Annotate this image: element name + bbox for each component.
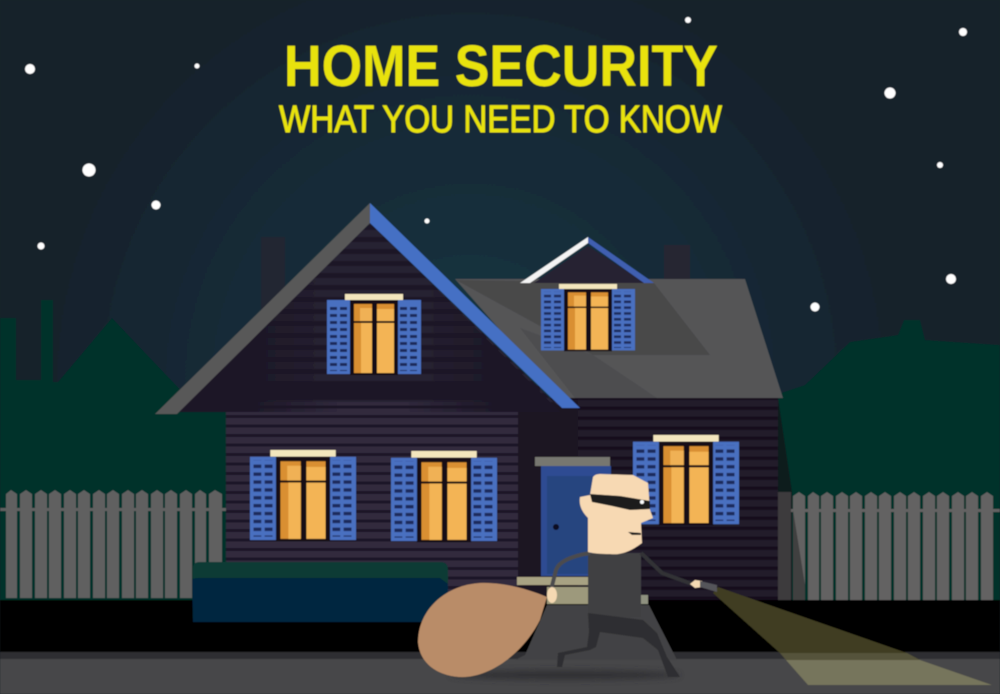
window: lower left [250,450,356,541]
window: dormer [541,284,635,351]
dormer blue edge [588,237,654,283]
rear arm [551,553,590,590]
road [0,659,1000,694]
subheading: WHAT YOU NEED TO KNOW [279,99,722,141]
window: right wing [633,435,739,525]
title [279,34,722,141]
rear hand [547,587,557,603]
head [580,474,653,554]
door lintel [535,457,610,466]
main roof blue slope [370,203,580,408]
house shadow on trees [778,398,792,600]
fence right [778,492,1000,600]
torso [588,553,641,617]
mask [590,494,650,510]
porch steps [517,577,648,604]
front walkway [515,605,677,660]
ground strip [0,600,1000,653]
door frame [541,466,611,576]
window: lower centre [391,451,497,542]
fence left [0,490,226,598]
chimney silhouettes [261,237,690,317]
right roof [455,279,783,398]
window: upper gable [327,294,421,375]
background trees left [0,300,226,600]
loot bag [418,583,547,677]
door panel [547,476,611,574]
right wing wall [518,398,778,600]
hedge [192,562,448,622]
central dark wall [518,400,578,600]
road kerb [0,652,1000,660]
flashlight [690,580,717,592]
front door [535,457,611,576]
house [155,203,783,600]
flashlight beam [713,587,992,685]
main roof grey slope [155,203,370,414]
stars [25,17,967,312]
dormer white edge [520,237,588,283]
background trees right [775,320,1000,600]
legs [557,613,680,677]
gable wall [178,223,560,412]
burglar [418,474,717,680]
front arm [641,553,692,584]
dormer wall [534,246,645,283]
main lower wall [226,400,518,600]
dormer [520,237,654,283]
door knob [553,524,559,530]
ground shadow [450,670,680,680]
mouth [628,532,641,535]
heading: home security: HOME SECURITY [284,34,718,99]
eye [640,500,644,504]
